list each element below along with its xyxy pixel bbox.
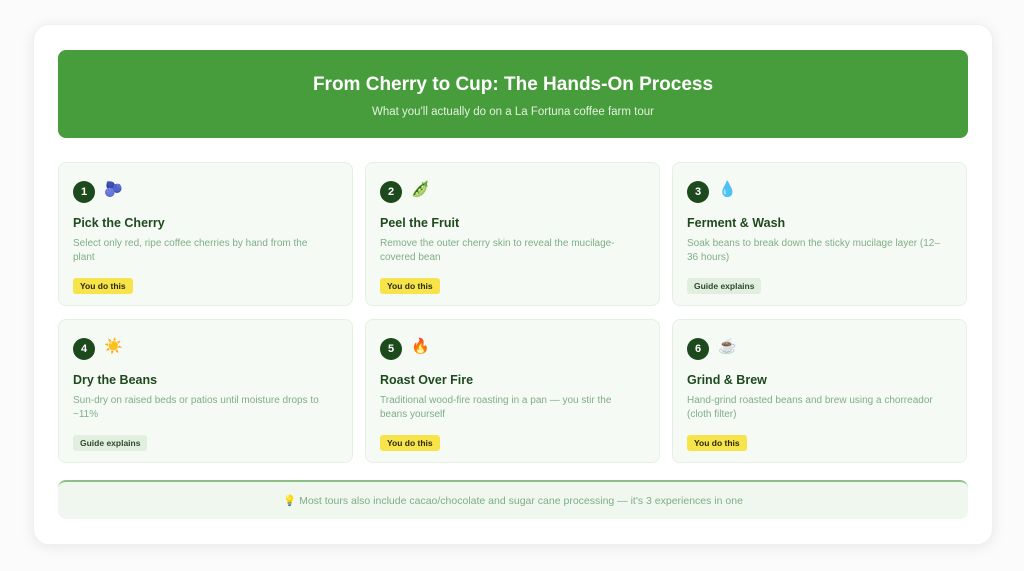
panel: step 5: You do this xyxy=(387,438,433,448)
panel: step 5: Roast Over Fire xyxy=(380,373,473,387)
panel: step 1: 🫐 xyxy=(104,181,123,198)
panel: step 6 xyxy=(672,319,967,463)
panel: step 5: 🔥 xyxy=(411,338,430,355)
panel: step 2 xyxy=(365,162,660,306)
panel: step 5: 5 xyxy=(388,343,394,355)
panel: step 3: Soak beans to break down the sticky mucilage layer (12–36 hours) xyxy=(687,238,940,263)
footer callout: 💡 Most tours also include cacao/chocolate and sugar cane processing — it's 3 experiences in one xyxy=(283,495,743,507)
panel: step 2: 🫛 xyxy=(411,181,430,198)
panel: step 4: Guide explains xyxy=(80,438,140,448)
panel: step 3 xyxy=(672,162,967,306)
panel: step 2: You do this xyxy=(387,281,433,291)
panel: step 6: You do this xyxy=(694,438,740,448)
panel: step 5 xyxy=(365,319,660,463)
panel: step 2: 2 xyxy=(388,186,394,198)
panel: step 1: You do this xyxy=(80,281,126,291)
header xyxy=(58,50,968,138)
panel: step 6: Grind & Brew xyxy=(687,373,767,387)
panel: step 3: Guide explains xyxy=(694,281,754,291)
panel: step 1: Pick the Cherry xyxy=(73,216,165,230)
panel: step 1: Select only red, ripe coffee cherries by hand from the plant xyxy=(73,238,307,263)
panel: step 4: 4 xyxy=(81,343,87,355)
panel: step 5: Traditional wood-fire roasting in a pan — you stir the beans yourself xyxy=(380,395,611,420)
panel: step 3: 3 xyxy=(695,186,701,198)
panel: step 1 xyxy=(58,162,353,306)
title: From Cherry to Cup: The Hands-On Process xyxy=(313,74,713,95)
panel: step 2: Peel the Fruit xyxy=(380,216,459,230)
panel: step 4: Sun-dry on raised beds or patios until moisture drops to ~11% xyxy=(73,395,319,420)
panel: step 4: Dry the Beans xyxy=(73,373,157,387)
panel: step 2: Remove the outer cherry skin to reveal the mucilage-covered bean xyxy=(380,238,615,263)
panel: step 3: Ferment & Wash xyxy=(687,216,785,230)
panel: step 3: 💧 xyxy=(718,181,737,198)
panel: step 1: 1 xyxy=(81,186,87,198)
footer callout xyxy=(58,480,968,519)
panel: step 6: 6 xyxy=(695,343,701,355)
panel: step 4 xyxy=(58,319,353,463)
panel: step 6: Hand-grind roasted beans and brew using a chorreador (cloth filter) xyxy=(687,395,933,420)
panel: step 6: ☕ xyxy=(718,338,737,355)
panel: step 4: ☀️ xyxy=(104,338,123,355)
subtitle: What you'll actually do on a La Fortuna coffee farm tour xyxy=(372,106,654,118)
